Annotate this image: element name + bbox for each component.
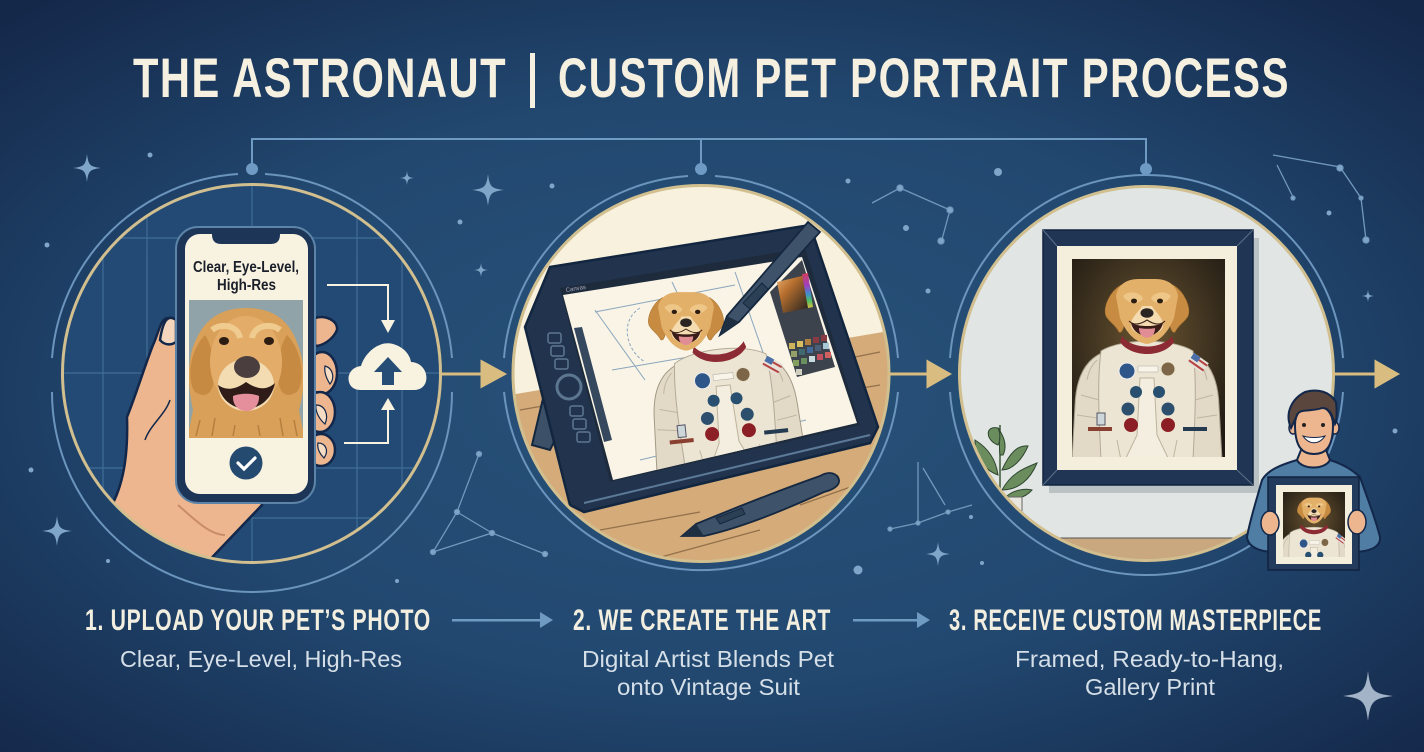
text: step 1 description: Clear, Eye-Level, High-Res [120,646,402,672]
outer ring step 3 [950,175,1343,575]
stylus raised [720,222,820,335]
phone caption: Clear, Eye-Level, [193,259,299,276]
title: THE ASTRONAUT [133,46,507,109]
starfield decoration [28,152,1398,583]
icon: phone [176,227,315,503]
disc step 1 [62,184,440,562]
arrow: into cloud from top [327,285,395,333]
outer ring step 1 [52,174,452,592]
dog photo [187,300,305,440]
heading: step 1: 1. UPLOAD YOUR PET’S PHOTO [85,604,431,637]
text: step 2 description line 2: onto Vintage Suit [617,674,801,700]
layer strip [574,327,612,442]
astronaut dog on canvas [644,292,806,475]
phone caption line 2: High-Res [217,277,276,294]
arrow: step 2 to 3 [888,362,949,386]
constellations [430,155,1369,556]
arrow: step 3 onward [1332,362,1397,386]
tablet express keys [548,333,590,442]
arrow: label 1 to 2 [452,612,553,628]
tablet toolbar text: Canvas [565,285,586,294]
scene: wall [956,184,1336,568]
tablet stand [530,398,554,452]
stylus on desk [682,473,839,536]
panel: step 1 upload [52,174,452,592]
icon: hand holding phone [112,317,337,570]
gold ring step 1 [62,184,440,562]
arrow: label 2 to 3 [853,612,930,628]
icon: upload cloud [348,343,426,390]
heading: step 2: 2. WE CREATE THE ART [573,604,831,637]
text: step 3 description line 2: Gallery Print [1085,674,1216,700]
decorative sparkle [1343,671,1393,721]
person holding print [1247,390,1380,592]
title [133,46,1290,109]
hands [1261,511,1279,535]
arrow: into cloud from bottom [344,398,395,443]
blueprint grid [60,180,445,570]
gold ring step 2 [513,186,889,562]
color panel [770,260,835,377]
canvas guides [595,272,806,460]
check badge [230,446,262,480]
icon: plant [975,425,1037,519]
gold ring step 3 [960,186,1334,560]
tablet [525,225,878,512]
astronaut dog painting [1072,279,1222,460]
connector: top bracket linking the three steps [247,139,1151,174]
held print [1267,476,1360,571]
arrow: step 1 to 2 [441,362,504,386]
panel: step 2 art [504,176,898,570]
sideboard [1060,538,1233,559]
text: step 3 description: Framed, Ready-to-Hang, [1015,646,1284,672]
scene: wall and desk [510,184,895,570]
framed portrait [1043,230,1259,493]
outer ring step 2 [504,176,898,570]
panel: step 3 masterpiece [950,175,1380,593]
text: step 2 description: Digital Artist Blends Pet [582,646,835,672]
